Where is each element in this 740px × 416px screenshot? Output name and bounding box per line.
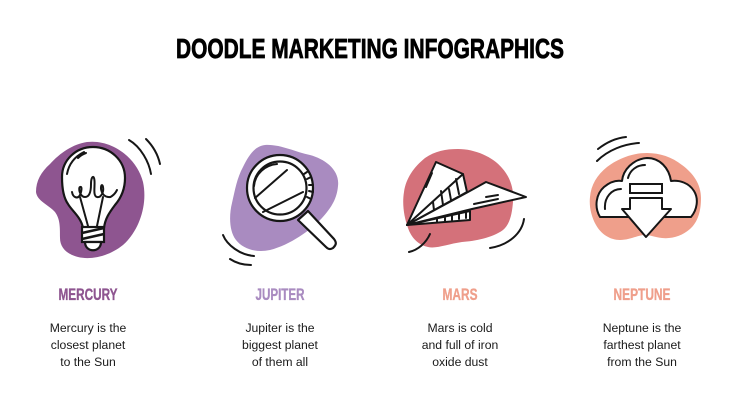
description: jupiter: of them all xyxy=(252,355,308,369)
description: jupiter xyxy=(242,321,319,369)
icon: light bulb xyxy=(36,139,160,258)
label: mars: MARS xyxy=(442,286,478,304)
description: mercury: Mercury is the xyxy=(50,321,126,335)
description: jupiter: biggest planet xyxy=(242,338,319,352)
description: jupiter: Jupiter is the xyxy=(245,321,315,335)
description: mars: and full of iron xyxy=(422,338,498,352)
icon: download cloud xyxy=(590,137,701,240)
description: mars xyxy=(422,321,498,369)
description: mars: oxide dust xyxy=(432,355,488,369)
description: mercury: closest planet xyxy=(51,338,126,352)
description: neptune: from the Sun xyxy=(607,355,677,369)
label: neptune: NEPTUNE xyxy=(614,286,670,304)
panel: neptune xyxy=(590,137,701,369)
bulb base xyxy=(82,227,104,250)
description: neptune xyxy=(603,321,682,369)
label: jupiter: JUPITER xyxy=(256,286,305,304)
description: mercury: to the Sun xyxy=(60,355,116,369)
icon: magnifying glass xyxy=(223,145,338,265)
description: neptune: Neptune is the xyxy=(603,321,682,335)
description: mercury xyxy=(50,321,126,369)
title: DOODLE MARKETING INFOGRAPHICS xyxy=(176,33,564,64)
panel: mercury xyxy=(36,139,160,369)
panel: jupiter xyxy=(223,145,338,369)
label: mercury: MERCURY xyxy=(58,286,118,304)
panel: mars xyxy=(403,149,526,369)
description: neptune: farthest planet xyxy=(603,338,681,352)
icon: paper plane xyxy=(403,149,526,252)
description: mars: Mars is cold xyxy=(427,321,493,335)
